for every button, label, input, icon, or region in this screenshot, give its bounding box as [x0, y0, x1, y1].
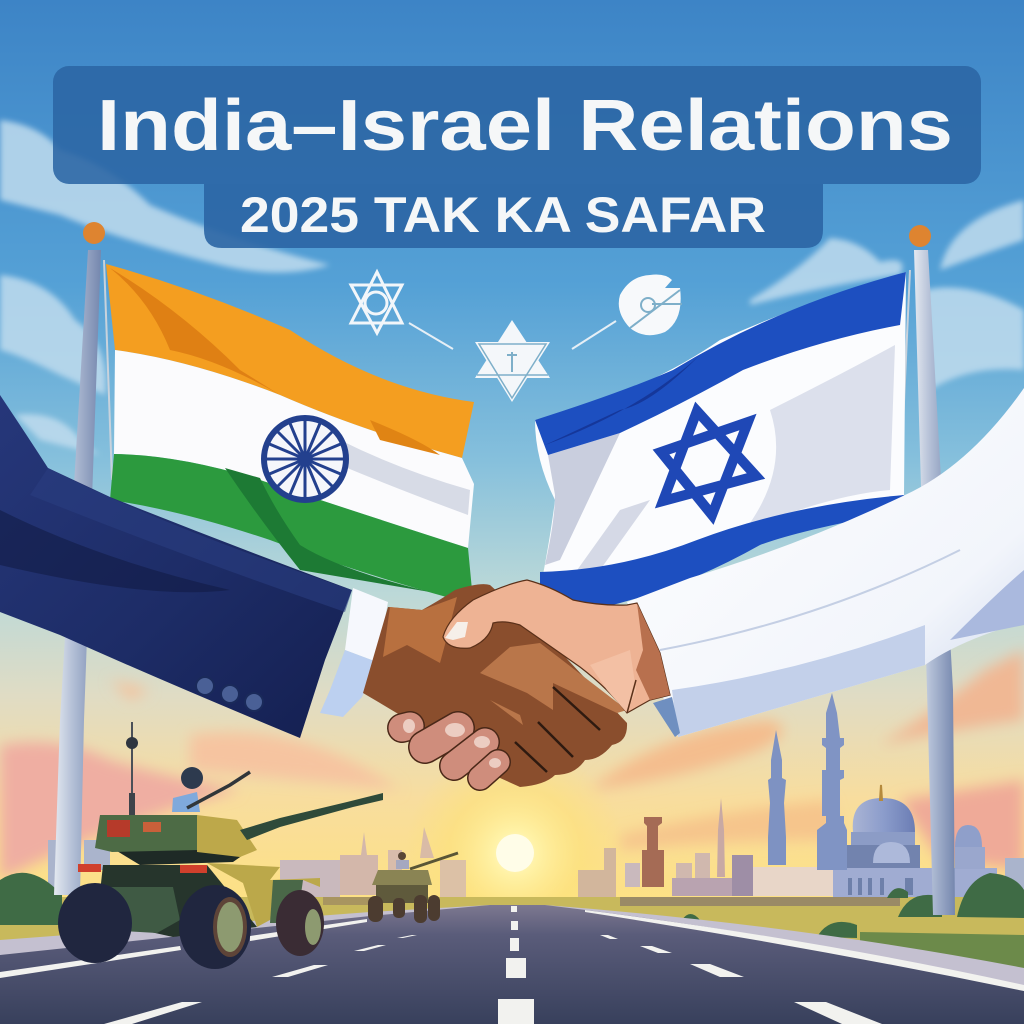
- wheels: [58, 883, 324, 969]
- subtitle: 2025 TAK KA SAFAR: [240, 187, 766, 243]
- connector line right: [572, 321, 616, 349]
- road: [0, 905, 1024, 1024]
- flagpole left: [54, 222, 112, 895]
- lower fingers: [402, 719, 501, 778]
- clouds: [0, 120, 1024, 455]
- title panel: [53, 66, 981, 184]
- turret: [95, 815, 257, 865]
- handshake: [363, 580, 670, 787]
- icon: star emblem left: [351, 272, 402, 333]
- right white sleeve: [627, 388, 1024, 737]
- sunset clouds: [0, 650, 1024, 880]
- flagpole right: [900, 225, 955, 915]
- monument tower: [642, 817, 664, 887]
- hull: [78, 863, 320, 937]
- distant tank: [368, 852, 458, 923]
- road markings: [0, 906, 1024, 1024]
- light hand: [443, 580, 670, 713]
- suit buttons: [196, 677, 263, 711]
- subtitle panel: [204, 184, 823, 248]
- icon: star emblem centre: [475, 320, 550, 402]
- ashoka chakra: [264, 418, 346, 500]
- star of david: [661, 411, 756, 515]
- main title: India–Israel Relations: [97, 86, 953, 166]
- dark hand: [363, 584, 627, 787]
- cannon: [240, 793, 383, 840]
- main military vehicle: [58, 722, 383, 969]
- soldier: [172, 767, 250, 812]
- antenna: [126, 722, 138, 815]
- thumbnail: [445, 622, 468, 640]
- Israeli flag: [535, 272, 906, 608]
- shirt cuff: [320, 588, 388, 717]
- sun: [405, 743, 625, 963]
- distant skyline: [48, 827, 1024, 900]
- icon: globe emblem right: [619, 275, 682, 335]
- mosque: [717, 693, 997, 897]
- connector line left: [409, 323, 453, 349]
- Indian flag: [106, 264, 474, 598]
- left suit arm: [0, 395, 388, 738]
- trees: [0, 873, 1024, 938]
- ground: [0, 897, 1024, 1024]
